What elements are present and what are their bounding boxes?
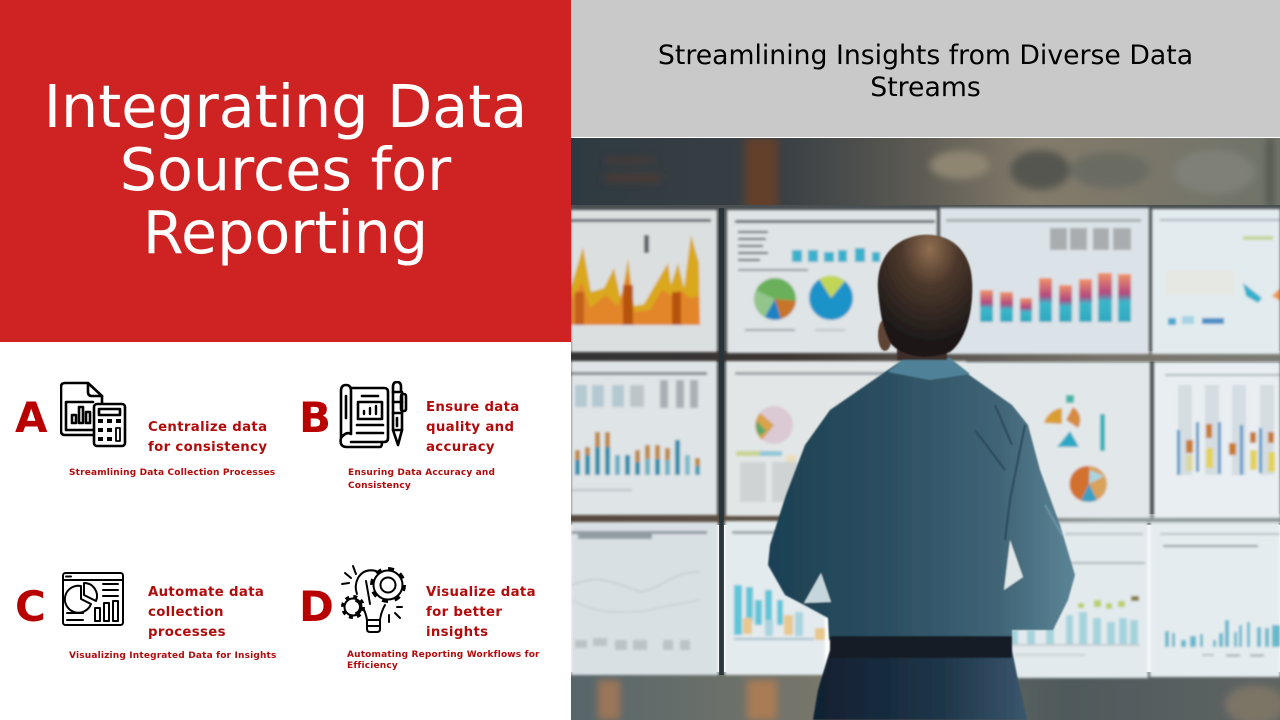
icon: notebook and pen	[339, 381, 408, 448]
photo: man viewing data charts on a wall	[571, 138, 1280, 720]
panel: grey subtitle banner	[571, 0, 1280, 137]
panel: red title block	[0, 0, 571, 342]
icon: dashboard window	[62, 572, 124, 626]
heading B	[426, 400, 520, 454]
heading C: processes	[148, 624, 226, 640]
note D: Efficiency	[347, 661, 398, 671]
heading D: Visualize data	[426, 584, 536, 600]
item A	[15, 382, 275, 478]
man seen from behind	[768, 235, 1075, 720]
note B: Ensuring Data Accuracy and	[348, 468, 495, 478]
heading A: Centralize data	[148, 420, 267, 435]
subtitle: Streams	[870, 72, 981, 103]
chart panels row 3	[571, 521, 1280, 678]
letter D: D	[299, 582, 334, 631]
heading C	[148, 584, 264, 640]
heading D: insights	[426, 624, 488, 640]
icon: document and calculator	[60, 382, 126, 448]
heading C: Automate data	[148, 584, 264, 600]
title: Integrating Data	[44, 73, 527, 141]
heading B: Ensure data	[426, 400, 520, 414]
title: Sources for	[120, 136, 451, 204]
title: Reporting	[143, 199, 428, 267]
heading C: collection	[148, 604, 224, 620]
item D	[299, 565, 540, 671]
belt	[830, 636, 1012, 658]
item C	[15, 572, 277, 661]
heading A: for consistency	[148, 440, 267, 455]
heading B: quality and	[426, 420, 514, 434]
note C: Visualizing Integrated Data for Insights	[69, 651, 277, 661]
trousers	[813, 650, 1027, 720]
chart panels row 1	[571, 208, 1280, 354]
note B	[348, 468, 495, 491]
heading A	[148, 420, 267, 455]
wall background	[571, 138, 1280, 720]
item B	[299, 381, 520, 491]
collar	[888, 358, 970, 380]
note D: Automating Reporting Workflows for	[347, 650, 540, 660]
ear and neck	[878, 319, 892, 351]
note A: Streamlining Data Collection Processes	[69, 468, 275, 478]
note B: Consistency	[348, 481, 411, 491]
note D	[347, 650, 540, 671]
icon: light bulb with gears	[341, 565, 406, 633]
subtitle: Streamlining Insights from Diverse Data	[658, 40, 1193, 71]
letter A: A	[15, 392, 48, 442]
chart panels row 2	[571, 361, 1280, 518]
letter B: B	[299, 392, 331, 442]
subtitle	[658, 40, 1193, 103]
arm gaps	[1004, 540, 1023, 590]
heading D	[426, 584, 536, 640]
heading B: accuracy	[426, 440, 495, 454]
letter C: C	[15, 582, 46, 631]
title	[44, 73, 527, 267]
hair	[878, 235, 972, 357]
shirt	[768, 358, 1075, 640]
shirt folds	[975, 405, 1025, 540]
heading D: for better	[426, 604, 502, 620]
